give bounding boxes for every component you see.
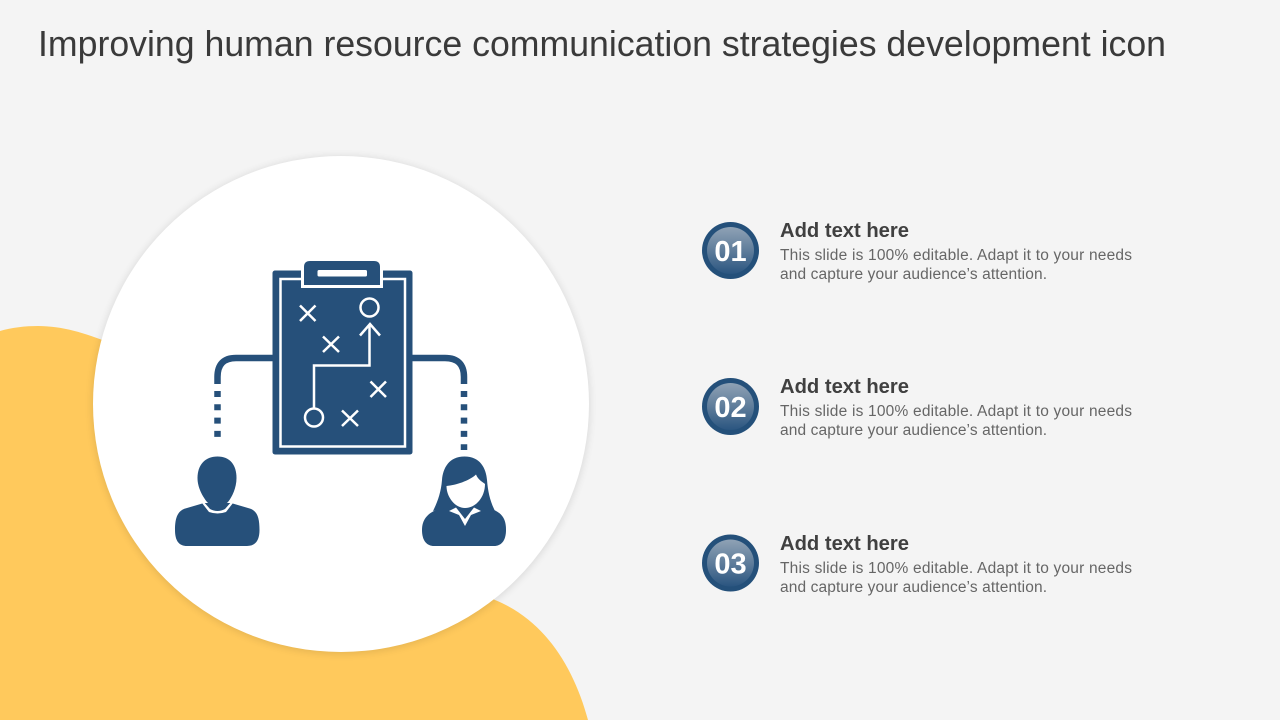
body 01: and capture your audience’s attention.	[780, 266, 1047, 283]
body 03	[780, 560, 1132, 596]
body 03: This slide is 100% editable. Adapt it to your needs	[780, 560, 1132, 577]
title: Improving human resource communication strategies development icon	[38, 23, 1166, 64]
icon: woman	[422, 456, 506, 546]
badge 03: 03	[714, 548, 747, 580]
heading 02: Add text here	[780, 376, 909, 398]
body 01: This slide is 100% editable. Adapt it to your needs	[780, 247, 1132, 264]
item 02	[702, 376, 1132, 439]
heading 03: Add text here	[780, 533, 909, 555]
badge 02: 02	[714, 392, 747, 424]
badge 02	[702, 378, 759, 435]
item 01	[702, 220, 1132, 283]
body 02: This slide is 100% editable. Adapt it to your needs	[780, 403, 1132, 420]
item 03	[702, 533, 1132, 596]
play diagram	[300, 298, 386, 426]
body 02	[780, 403, 1132, 439]
badge 01: 01	[714, 236, 747, 268]
heading 01: Add text here	[780, 220, 909, 242]
icon: man	[175, 456, 260, 546]
white circle panel	[92, 156, 590, 654]
icon: connector right	[412, 358, 464, 450]
badge 01	[702, 222, 759, 279]
badge 03	[702, 534, 759, 592]
body 03: and capture your audience’s attention.	[780, 579, 1047, 596]
icon: connector left	[218, 358, 273, 437]
body 01	[780, 247, 1132, 283]
yellow background shape	[0, 326, 588, 720]
icon: clipboard	[272, 261, 413, 454]
body 02: and capture your audience’s attention.	[780, 422, 1047, 439]
